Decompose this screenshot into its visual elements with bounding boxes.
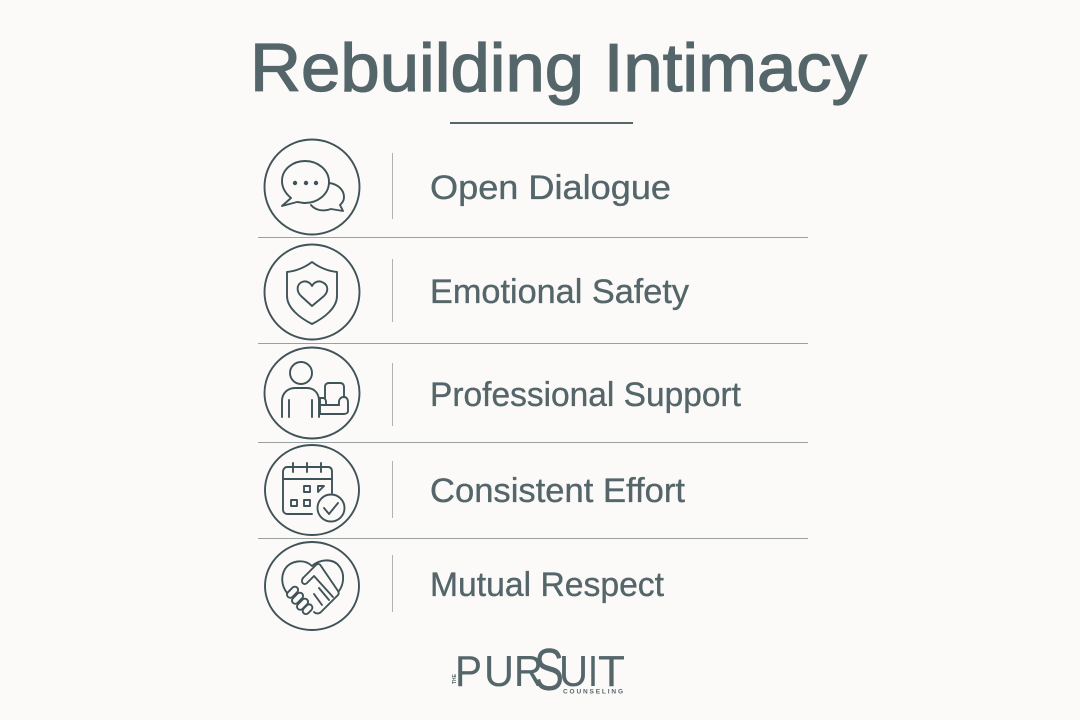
logo: The Pursuit Counseling [452, 638, 625, 704]
icon: heart with handshake [265, 542, 359, 630]
logo: The Pursuit Counseling: T [598, 647, 625, 696]
icon: calendar with check [265, 445, 359, 535]
label: Professional Support: Professional Support [430, 376, 742, 414]
title: Rebuilding Intimacy [250, 30, 867, 106]
logo: The Pursuit Counseling: U [559, 647, 588, 696]
logo: The Pursuit Counseling: P [455, 647, 482, 696]
logo: The Pursuit Counseling: R [514, 647, 543, 696]
logo: The Pursuit Counseling: U [484, 647, 514, 696]
label: Open Dialogue: Open Dialogue [430, 169, 671, 207]
logo: The Pursuit Counseling: S [534, 638, 564, 704]
icon: speech bubbles [264, 140, 360, 234]
label: Emotional Safety: Emotional Safety [430, 273, 689, 311]
label: Consistent Effort: Consistent Effort [430, 472, 686, 510]
icon: person with armchair [264, 348, 360, 438]
logo: The Pursuit Counseling: THE [452, 673, 458, 684]
logo: The Pursuit Counseling: COUNSELING [563, 688, 623, 696]
logo: The Pursuit Counseling: I [588, 647, 598, 696]
title underline [450, 122, 633, 124]
label: Mutual Respect: Mutual Respect [430, 566, 665, 604]
icon: shield with heart [264, 244, 360, 340]
